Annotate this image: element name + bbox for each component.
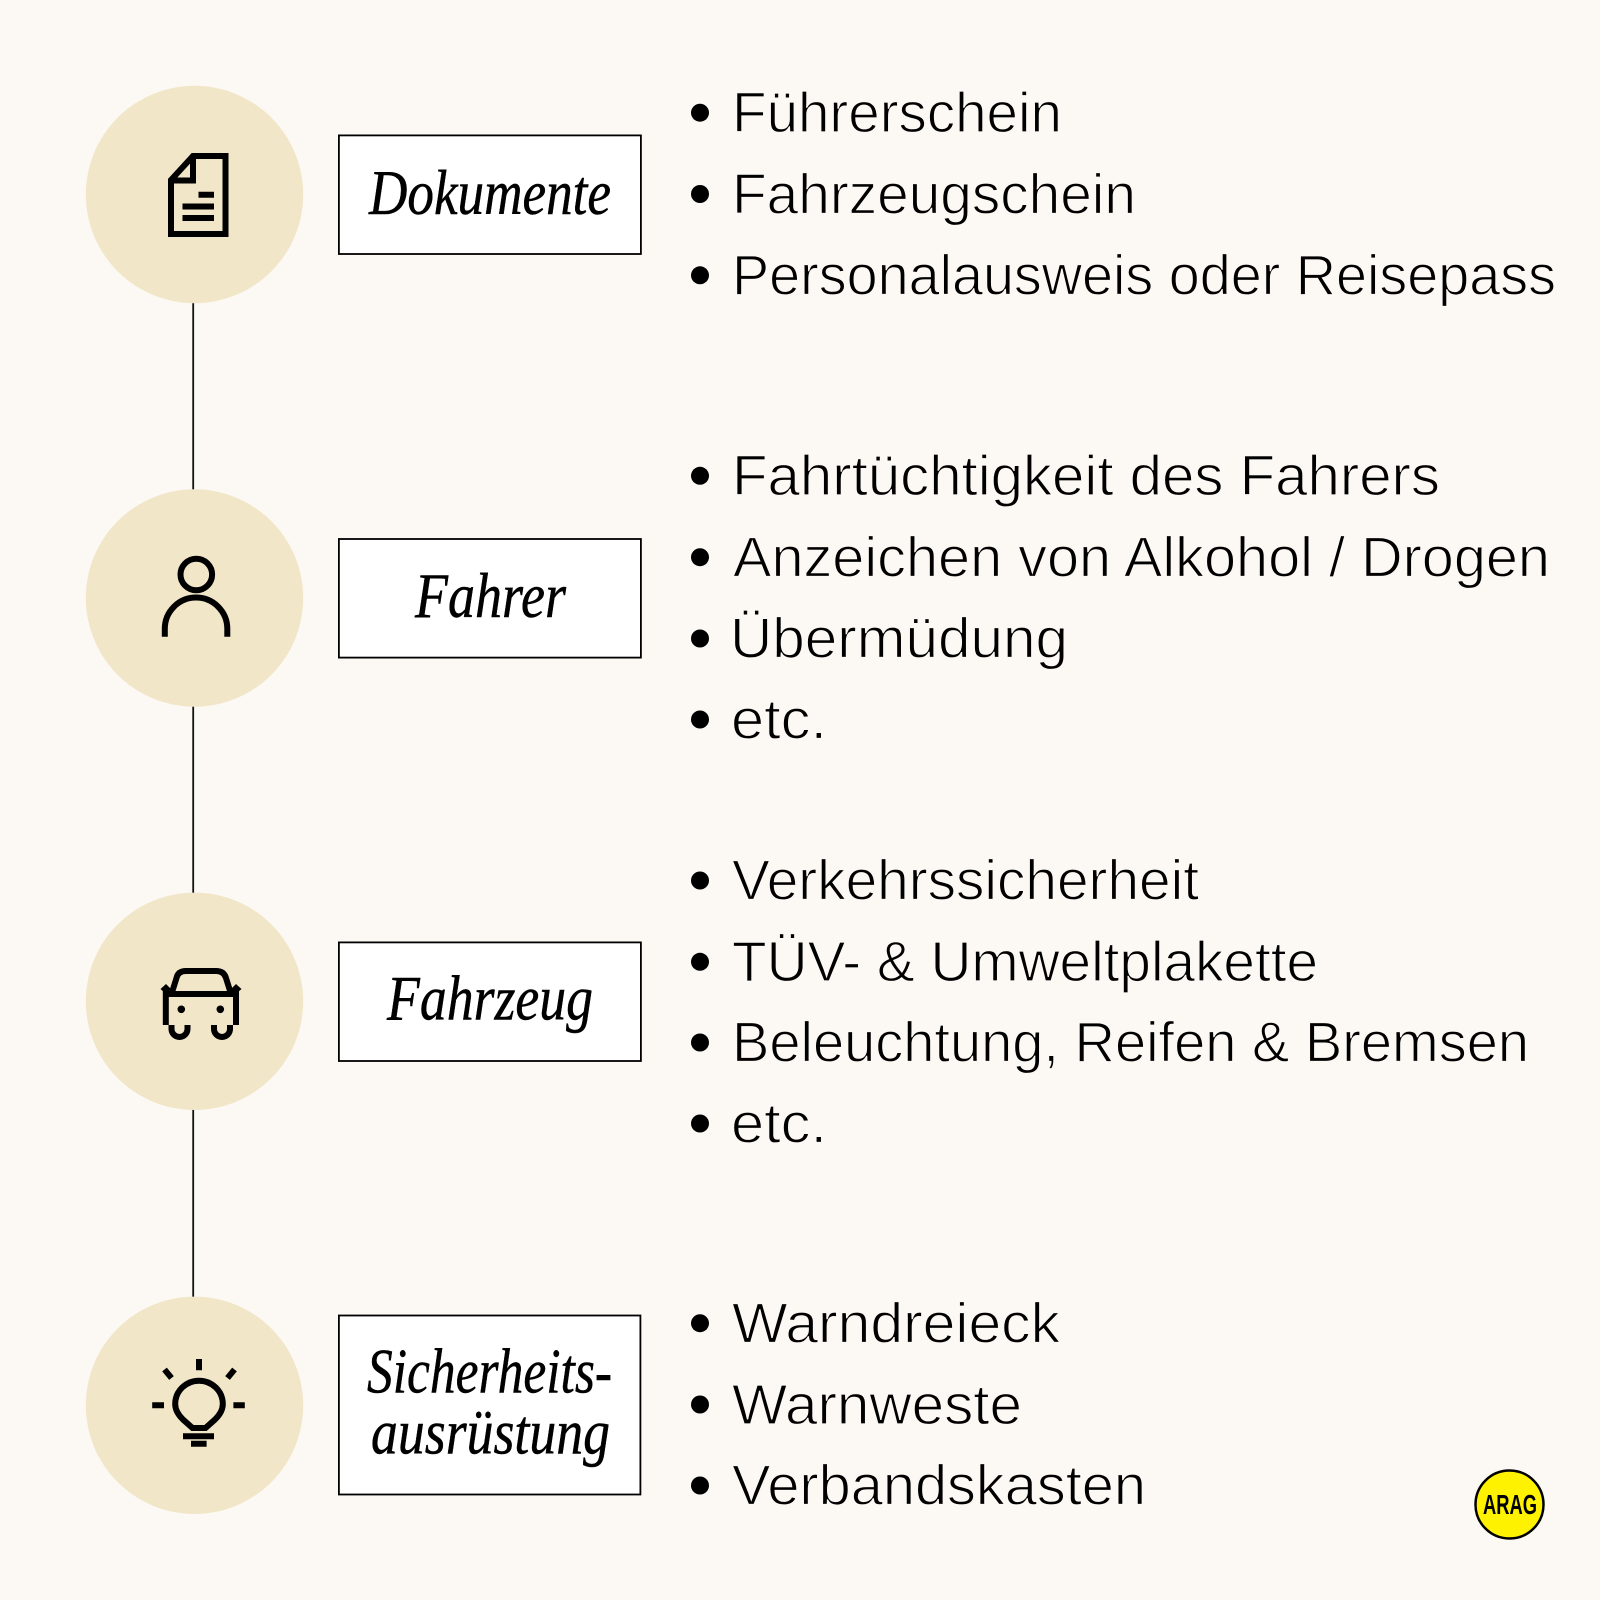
list: Fahrer: Übermüdung: [730, 607, 1068, 671]
label box: Dokumente: Dokumente: [368, 157, 611, 228]
label box: Dokumente: [339, 135, 641, 254]
label box: Sicherheitsausrüstung: [339, 1316, 640, 1494]
icon circle: Fahrzeug: [86, 893, 303, 1110]
list: Fahrer: Fahrtüchtigkeit des Fahrers: [732, 444, 1440, 508]
connector line between circles: [192, 300, 194, 1300]
list: Fahrer: etc.: [731, 688, 827, 752]
panel: Dokumente: [86, 81, 1556, 308]
label box: Fahrzeug: [339, 942, 641, 1061]
list: Sicherheitsausrüstung: Warnweste: [732, 1373, 1022, 1437]
panel: Sicherheitsausrüstung: [86, 1292, 1146, 1518]
icon: person: [165, 559, 227, 637]
icon: document: [171, 156, 226, 234]
label box: Fahrzeug: Fahrzeug: [386, 963, 593, 1034]
list: Dokumente: Führerschein: [732, 81, 1062, 145]
list: Fahrzeug: Beleuchtung, Reifen & Bremsen: [732, 1011, 1529, 1075]
list: Sicherheitsausrüstung: Verbandskasten: [732, 1454, 1146, 1518]
icon circle: Dokumente: [86, 86, 303, 303]
label box: Sicherheitsausrüstung: ausrüstung: [371, 1397, 610, 1468]
panel: Fahrer: [86, 444, 1550, 752]
list: Dokumente: Personalausweis oder Reisepass: [732, 244, 1556, 308]
label box: Fahrer: Fahrer: [414, 560, 567, 631]
logo: ARAG: ARAG: [1483, 1489, 1537, 1520]
label box: Sicherheitsausrüstung: Sicherheits-: [367, 1336, 612, 1407]
list: Sicherheitsausrüstung: Warndreieck: [732, 1292, 1061, 1356]
label box: Fahrer: [339, 539, 641, 658]
panel: Fahrzeug: [86, 849, 1529, 1156]
list: Dokumente: Fahrzeugschein: [732, 162, 1136, 226]
logo: ARAG: [1476, 1470, 1544, 1538]
list: Fahrzeug: TÜV- & Umweltplakette: [732, 930, 1318, 994]
list: Sicherheitsausrüstung: [691, 1292, 1146, 1518]
icon circle: Sicherheitsausrüstung: [86, 1297, 303, 1514]
list: Fahrzeug: [691, 849, 1529, 1156]
list: Fahrer: [691, 444, 1550, 752]
icon: car: [160, 971, 242, 1037]
list: Fahrer: Anzeichen von Alkohol / Drogen: [733, 525, 1550, 589]
icon: light bulb: [152, 1359, 245, 1444]
list: Fahrzeug: etc.: [731, 1092, 827, 1156]
list: Fahrzeug: Verkehrssicherheit: [732, 849, 1199, 913]
list: Dokumente: [691, 81, 1556, 308]
icon circle: Fahrer: [86, 489, 303, 707]
